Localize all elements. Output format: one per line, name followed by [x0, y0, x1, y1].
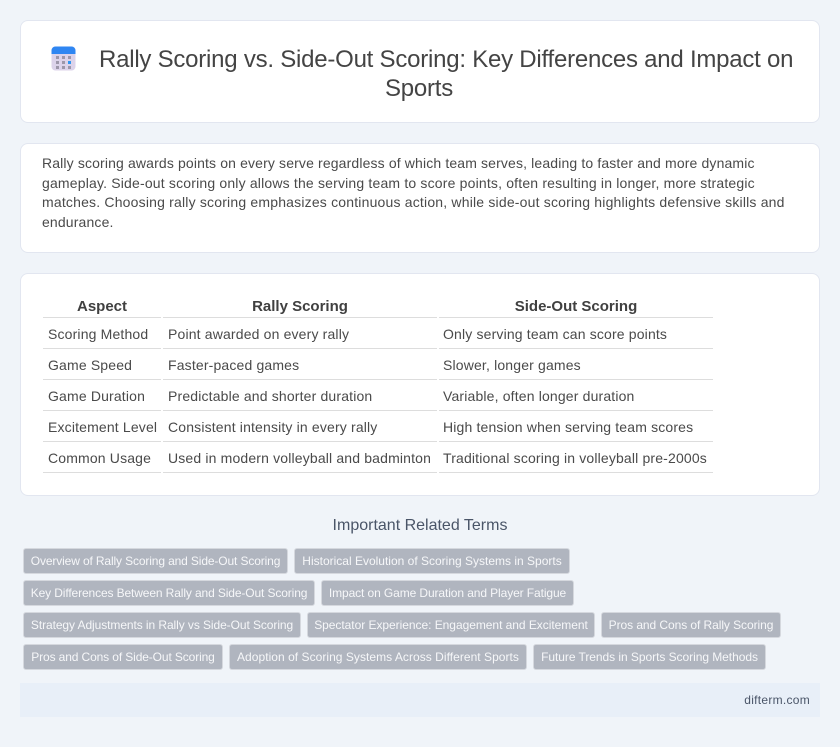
tag [23, 548, 288, 574]
row: Common Usage: Traditional scoring in volleyball pre-2000s [443, 450, 707, 466]
row: Game Duration: Game Duration [48, 388, 145, 404]
row: Common Usage [48, 450, 707, 466]
intro paragraph [42, 155, 785, 230]
tag: Strategy Adjustments in Rally vs Side-Out Scoring [31, 618, 293, 632]
header panel [20, 20, 820, 123]
column header: Rally Scoring: Rally Scoring [252, 298, 348, 315]
row: Game Duration: Predictable and shorter duration [168, 388, 372, 404]
intro paragraph: endurance. [42, 214, 114, 230]
row: Excitement Level: Excitement Level [48, 419, 157, 435]
row: Excitement Level: High tension when serving team scores [443, 419, 693, 435]
tag [23, 580, 315, 606]
intro text panel [20, 143, 820, 253]
tag: Adoption of Scoring Systems Across Different Sports [237, 650, 519, 664]
tag: Key Differences Between Rally and Side-Out Scoring [31, 586, 307, 600]
row: Game Speed: Faster-paced games [168, 357, 299, 373]
comparison table panel [20, 273, 820, 496]
row: Scoring Method: Point awarded on every rally [168, 326, 349, 342]
row: Excitement Level [48, 419, 693, 435]
tag [601, 612, 781, 638]
title [99, 46, 793, 102]
title: Sports [385, 75, 453, 102]
comparison table [43, 298, 713, 473]
icon: calendar grid [52, 46, 76, 70]
row: Excitement Level: Consistent intensity in every rally [168, 419, 377, 435]
tag: Pros and Cons of Side-Out Scoring [31, 650, 215, 664]
tag: Impact on Game Duration and Player Fatigue [329, 586, 566, 600]
row: Game Speed: Game Speed [48, 357, 132, 373]
row: Game Duration [48, 388, 634, 404]
column header: Aspect: Aspect [77, 298, 127, 315]
intro paragraph: Rally scoring awards points on every serve regardless of which team serves, leading to faster and more dynamic [42, 155, 755, 171]
intro paragraph: gameplay. Side-out scoring only allows the serving team to score points, often resulting in longer, more strategic [42, 174, 755, 190]
footer site name: difterm.com [744, 693, 810, 707]
row: Game Speed: Slower, longer games [443, 357, 581, 373]
column header: Side-Out Scoring: Side-Out Scoring [515, 298, 637, 315]
tag: Future Trends in Sports Scoring Methods [541, 650, 758, 664]
title: Rally Scoring vs. Side-Out Scoring: Key Differences and Impact on [99, 46, 793, 73]
tag [307, 612, 595, 638]
tag [23, 644, 223, 670]
tag [229, 644, 527, 670]
tag [294, 548, 570, 574]
row: Common Usage: Used in modern volleyball and badminton [168, 450, 431, 466]
row: Game Speed [48, 357, 581, 373]
tag [533, 644, 766, 670]
row: Scoring Method [48, 326, 667, 342]
related terms heading: Important Related Terms [333, 517, 507, 534]
footer bar [20, 683, 820, 717]
row: Scoring Method: Scoring Method [48, 326, 148, 342]
row: Scoring Method: Only serving team can score points [443, 326, 667, 342]
tag [321, 580, 574, 606]
row: Game Duration: Variable, often longer duration [443, 388, 634, 404]
row: Common Usage: Common Usage [48, 450, 151, 466]
tag: Historical Evolution of Scoring Systems in Sports [302, 554, 562, 568]
intro paragraph: matches. Choosing rally scoring emphasizes continuous action, while side-out scoring highlights defensive skills and [42, 194, 785, 210]
tag [23, 612, 301, 638]
tag: Pros and Cons of Rally Scoring [609, 618, 773, 632]
tag: Overview of Rally Scoring and Side-Out Scoring [31, 554, 280, 568]
related terms tags [23, 548, 781, 670]
tag: Spectator Experience: Engagement and Excitement [314, 618, 588, 632]
